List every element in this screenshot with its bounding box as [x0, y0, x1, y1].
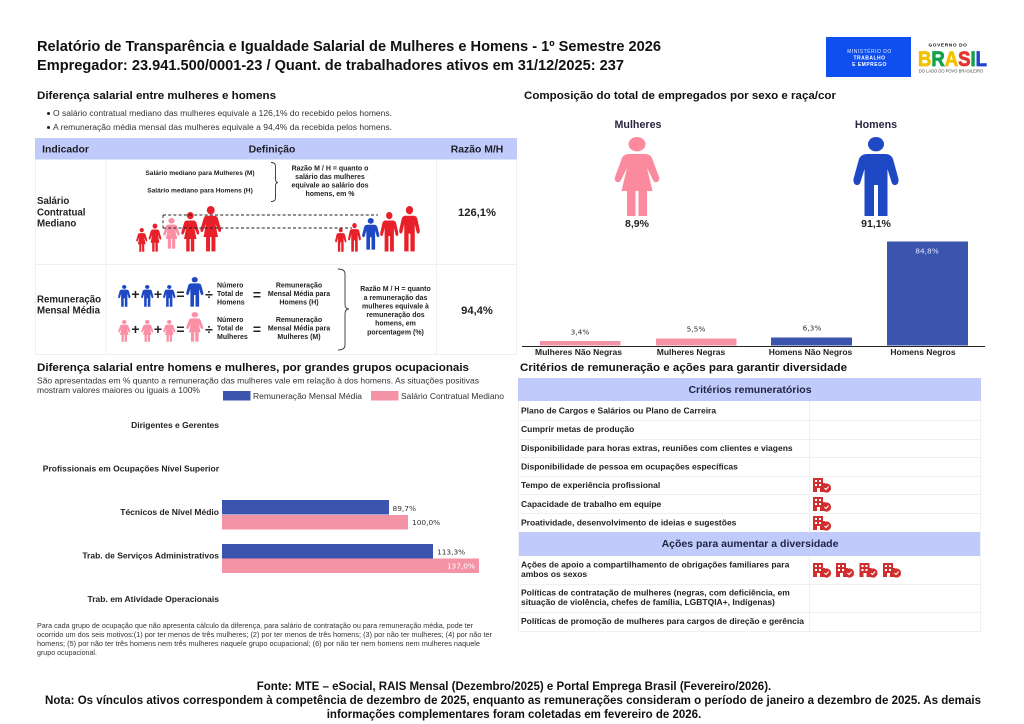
equation: men: ÷ [205, 286, 213, 302]
logo: ministério: MINISTÉRIO DO [847, 48, 892, 55]
actions list: Ações de apoio a compartilhamento de obrigações familiares para [521, 560, 790, 570]
bar chart: occupational groups: Trab. em Atividade Operacionais [88, 594, 219, 604]
row label: salário contratual mediano: Contratual [37, 207, 85, 218]
definition: salário mediano: Salário mediano para Homens (H) [147, 188, 253, 194]
footnote: grupo ocupacional. [37, 649, 97, 657]
actions list: Políticas de contratação de mulheres (negras, com deficiência, em [521, 588, 790, 598]
value: 94,4%: 94,4% [461, 305, 493, 317]
description: São apresentadas em % quanto a remuneração das mulheres vale em relação à dos homens. As situações positivas [37, 376, 479, 386]
bar chart: occupational groups: 137,0% [447, 562, 475, 570]
bar chart: occupational groups: 100,0% [412, 518, 440, 527]
table header [35, 138, 517, 160]
bar chart: race and sex: Homens Negros [890, 347, 956, 357]
logo: ministério [826, 37, 911, 77]
bracket and explanation [338, 269, 431, 350]
value: 126,1%: 126,1% [458, 207, 496, 219]
header: ações: Ações para aumentar a diversidade [662, 538, 839, 550]
men share: Homens [855, 119, 897, 131]
title: Relatório de Transparência e Igualdade Salarial de Mulheres e Homens - 1º Semestre 2026 [37, 39, 661, 55]
women share [615, 119, 662, 230]
bar chart: race and sex: Homens Não Negros [769, 347, 853, 357]
header: critérios remuneratórios: Critérios remuneratórios [688, 384, 812, 396]
heading: diferença por grupos: Diferença salarial entre homens e mulheres, por grandes grupos ocupacionais [37, 362, 469, 374]
title [37, 39, 661, 74]
equation: women: Mensal Média para [268, 326, 330, 332]
title: Empregador: 23.941.500/0001-23 / Quant. de trabalhadores ativos em 31/12/2025: 237 [37, 58, 624, 74]
equation: men: Homens [217, 300, 245, 306]
equation: men [118, 277, 330, 307]
table header: Indicador [42, 144, 89, 156]
criteria list: Cumprir metas de produção [521, 424, 634, 434]
table header: Definição [249, 144, 295, 156]
equation: men: + [154, 286, 162, 302]
criteria list: Proatividade, desenvolvimento de ideias e sugestões [521, 518, 737, 528]
equation: men: = [176, 286, 185, 302]
men share [853, 119, 899, 230]
legend: Remuneração Mensal Média [253, 391, 362, 401]
bullet list [47, 108, 392, 132]
equation: women: + [131, 321, 140, 337]
equation: men: Homens (H) [279, 300, 319, 306]
footnote: homens; (5) por não ter três homens nem três mulheres naquele grupo ocupacional; (6) por não ter nem homens nem mulheres naquele [37, 640, 480, 648]
row label: remuneração mensal média: Remuneração [37, 294, 101, 306]
heading: diferença salarial: Diferença salarial entre mulheres e homens [37, 90, 276, 102]
bar chart: race and sex: 84,8% [915, 246, 939, 256]
legend [223, 391, 504, 401]
equation: men: Total de [217, 291, 243, 298]
actions list: ambos os sexos [521, 569, 587, 579]
definition: salário mediano: Razão M / H = quanto o [292, 166, 368, 172]
bracket and explanation: a remuneração das [364, 295, 428, 302]
footer source and note [45, 681, 981, 721]
definition: salário mediano: homens, em % [305, 191, 355, 198]
footnote: Para cada grupo de ocupação que não apresenta cálculo da diferença, para salário de contratação ou para remuneração média, pode ter [37, 622, 474, 630]
equation: men: Mensal Média para [268, 291, 330, 298]
bar chart: race and sex: Mulheres Negras [657, 347, 726, 357]
footnote: ocorrido um dos seis motivos:(1) por ter menos de três mulheres; (2) por ter menos de três homens; (3) por não ter mulheres; (4) por não ter [37, 631, 493, 639]
heading: critérios: Critérios de remuneração e ações para garantir diversidade [520, 362, 847, 374]
bracket and explanation: remuneração dos [366, 312, 425, 319]
bar chart: race and sex [522, 242, 985, 357]
equation: men: Número [217, 282, 243, 290]
icons: criteria checks [813, 478, 831, 531]
median dashed guide [163, 215, 378, 228]
table header: Razão M/H [451, 144, 503, 156]
equation: women: Remuneração [276, 317, 322, 324]
equation: women: Número [217, 317, 243, 324]
criteria list: Disponibilidade de pessoa em ocupações específicas [521, 462, 738, 472]
definition: salário mediano: salário das mulheres [295, 174, 365, 181]
footer source and note: Nota: Os vínculos ativos correspondem à competência de dezembro de 2025, enquanto as remunerações consideram o período de janeiro a dezembro de 2025. As demais [45, 695, 981, 707]
bar chart: race and sex: Mulheres Não Negras [535, 347, 622, 357]
bar chart: occupational groups: 89,7% [392, 504, 416, 513]
row label: remuneração mensal média: Mensal Média [37, 306, 101, 316]
bar chart: occupational groups: Profissionais em Ocupações Nível Superior [43, 464, 220, 474]
footer source and note: informações complementares foram coletadas em fevereiro de 2026. [327, 709, 701, 721]
bracket and explanation: mulheres equivale à [362, 304, 429, 310]
equation: women: Total de [217, 326, 243, 332]
legend: Salário Contratual Mediano [401, 391, 504, 401]
men share: 91,1% [861, 218, 892, 230]
equation: women: Mulheres [217, 334, 248, 341]
women share: 8,9% [625, 218, 650, 230]
logo: governo do brasil: DO LADO DO POVO BRASILEIRO [919, 68, 983, 74]
logo: ministério: E EMPREGO [852, 62, 887, 68]
women share: Mulheres [615, 119, 662, 131]
footer source and note: Fonte: MTE – eSocial, RAIS Mensal (Dezembro/2025) e Portal Emprega Brasil (Fevereiro/2026). [257, 681, 771, 693]
row label: salário contratual mediano: Mediano [37, 218, 76, 230]
description: mostram valores maiores ou iguais a 100% [37, 385, 200, 395]
bar chart: race and sex: 6,3% [803, 324, 821, 332]
equation: women: Mulheres (M) [277, 334, 321, 341]
equation: women: = [176, 321, 185, 337]
definition: salário mediano: Salário mediano para Mulheres (M) [145, 170, 255, 177]
bracket and explanation: Razão M / H = quanto [360, 286, 431, 293]
criteria list: Disponibilidade para horas extras, reuniões com clientes e viagens [521, 443, 793, 453]
icon group: men median [335, 206, 420, 252]
bar chart: occupational groups: Dirigentes e Gerentes [131, 420, 219, 430]
panel: indicator table [35, 138, 517, 354]
criteria list: Plano de Cargos e Salários ou Plano de Carreira [521, 406, 716, 416]
bracket and explanation: porcentagem (%) [367, 330, 424, 336]
definition: salário mediano: equivale ao salário dos [291, 182, 369, 190]
logo: ministério: TRABALHO [853, 56, 886, 62]
equation: men: Remuneração [276, 282, 322, 290]
bracket and explanation: homens, em [375, 321, 416, 328]
heading: composição: Composição do total de empregados por sexo e raça/cor [524, 90, 837, 102]
equation: women: = [253, 321, 261, 337]
bullet list: O salário contratual mediano das mulheres equivale a 126,1% do recebido pelos homens. [53, 108, 392, 118]
bullet list: A remuneração média mensal das mulheres equivale a 94,4% da recebida pelos homens. [53, 122, 392, 132]
equation: women: + [154, 321, 162, 337]
equation: men: + [131, 286, 140, 302]
icons: action checks [813, 563, 901, 578]
bar chart: occupational groups: Trab. de Serviços Administrativos [82, 550, 219, 560]
criteria list: Capacidade de trabalho em equipe [521, 499, 662, 509]
bar chart: occupational groups [43, 420, 479, 604]
equation: women: ÷ [205, 321, 213, 337]
equation: men: = [253, 286, 261, 302]
row label: salário contratual mediano: Salário [37, 196, 69, 207]
actions list: situação de violência, chefes de família, LGBTQIA+, Indígenas) [521, 597, 775, 607]
logo: governo do brasil: BRASIL [918, 48, 987, 71]
icon group: women median [136, 206, 221, 252]
criteria list: Tempo de experiência profissional [521, 480, 660, 490]
bar chart: race and sex: 3,4% [571, 328, 589, 336]
actions list: Políticas de promoção de mulheres para cargos de direção e gerência [521, 616, 804, 626]
bar chart: occupational groups: Técnicos de Nível Médio [120, 507, 219, 517]
panel: criteria table [518, 378, 981, 632]
bar chart: race and sex: 5,5% [687, 324, 705, 334]
definition: salário mediano [145, 162, 369, 202]
equation: women [118, 312, 330, 342]
logo: governo do brasil: GOVERNO DO [928, 42, 968, 48]
bar chart: occupational groups: 113,3% [437, 548, 465, 556]
